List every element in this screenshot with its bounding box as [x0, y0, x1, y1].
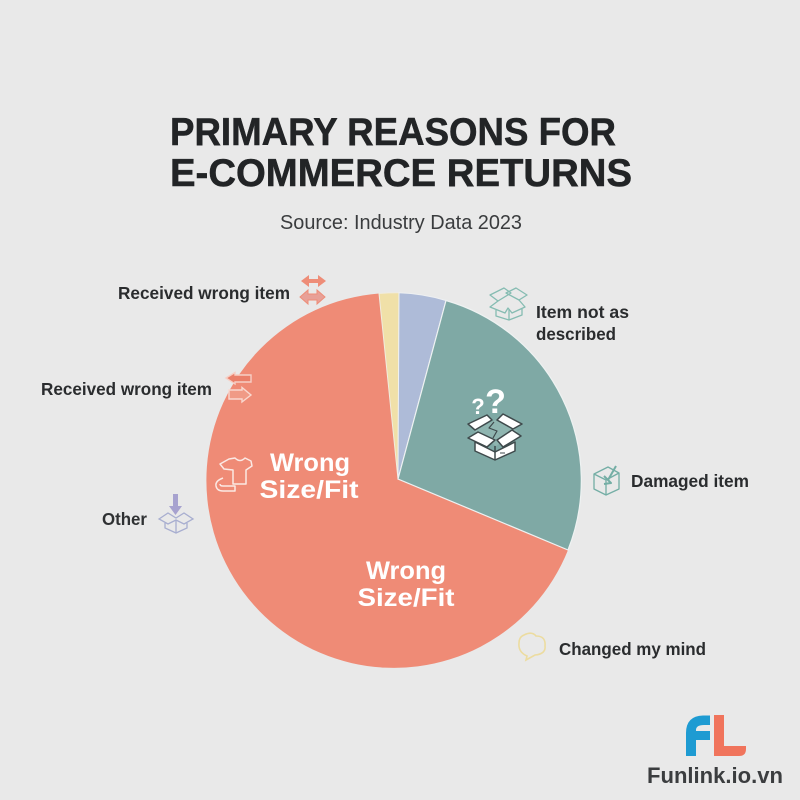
pie label: wrong size/fit lower: Wrong — [366, 557, 446, 585]
icon: open box with question marks: ? — [471, 394, 485, 419]
icon: box with down arrow — [159, 494, 193, 533]
icon: swap arrows middle — [226, 372, 251, 402]
label: changed my mind: Changed my mind — [559, 639, 706, 659]
icon: swap arrows top — [300, 275, 326, 304]
label: received wrong item top: Received wrong item — [118, 283, 290, 303]
pie label: wrong size/fit upper: Size/Fit — [260, 476, 359, 504]
pie label: wrong size/fit upper — [260, 449, 359, 504]
pie label: wrong size/fit lower — [358, 557, 455, 612]
pie chart — [206, 293, 581, 668]
upper flaps — [468, 415, 492, 430]
icon: t-shirt with tape — [216, 458, 252, 491]
lower flaps — [468, 432, 495, 447]
slice: other — [398, 293, 446, 479]
title: E-COMMERCE RETURNS — [170, 152, 632, 195]
question marks: ? — [485, 383, 506, 421]
label: item not as described: Item not as — [536, 302, 629, 322]
title — [170, 111, 632, 195]
pie label: wrong size/fit lower: Size/Fit — [358, 584, 455, 612]
slice: wrong size/fit — [206, 294, 568, 668]
title: PRIMARY REASONS FOR — [170, 111, 616, 154]
slice: changed my mind — [379, 293, 399, 479]
label: item not as described: described — [536, 324, 616, 344]
box interior — [474, 420, 518, 446]
pie label: wrong size/fit upper: Wrong — [270, 449, 350, 477]
label: other: Other — [102, 509, 147, 529]
icon: open box outline — [490, 288, 527, 320]
label: item not as described — [536, 302, 629, 344]
logo: wordmark: Funlink.io.vn — [647, 763, 783, 788]
logo: FL mark — [686, 715, 746, 756]
icon: damaged box — [594, 466, 619, 495]
icon: speech bubble — [519, 633, 545, 660]
slice: item not as described and damaged — [398, 300, 581, 550]
icon: open box with question marks — [468, 383, 522, 460]
crack — [489, 422, 497, 438]
label: damaged item: Damaged item — [631, 471, 749, 491]
label: received wrong item middle: Received wrong item — [41, 379, 212, 399]
box body — [475, 442, 515, 460]
subtitle: source: Source: Industry Data 2023 — [280, 212, 522, 234]
